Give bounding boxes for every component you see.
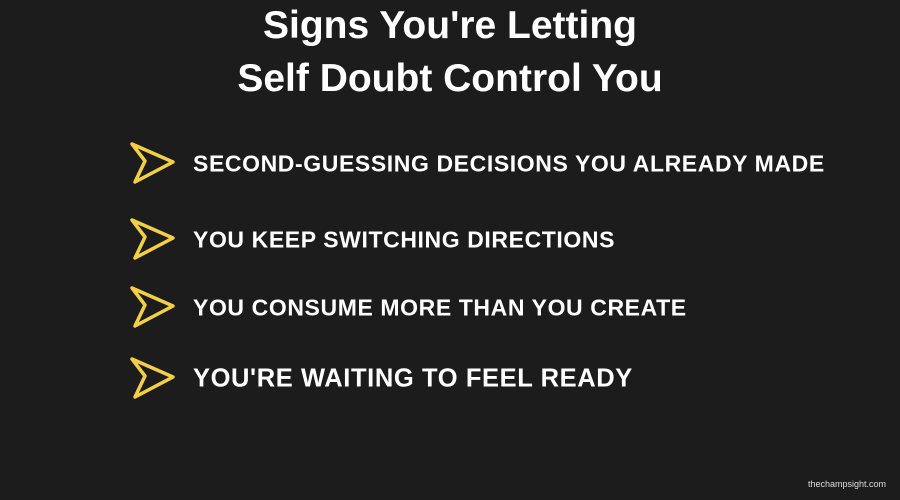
item 3: YOU CONSUME MORE THAN YOU CREATE [193, 294, 687, 320]
icon: arrow [130, 357, 175, 399]
item 2 [130, 218, 615, 260]
title: Self Doubt Control You [237, 57, 663, 100]
title: Signs You're Letting [263, 4, 637, 47]
item 3 [130, 286, 687, 328]
icon: arrow [130, 286, 175, 328]
icon: arrow [130, 218, 175, 260]
title [237, 4, 663, 100]
item 2: YOU KEEP SWITCHING DIRECTIONS [193, 226, 615, 252]
item 4 [130, 357, 633, 399]
icon: arrow [130, 142, 175, 184]
item 4: YOU'RE WAITING TO FEEL READY [193, 364, 633, 392]
item 1 [130, 142, 825, 184]
item 1: SECOND-GUESSING DECISIONS YOU ALREADY MADE [193, 150, 825, 176]
footer credit: thechampsight.com [808, 479, 886, 489]
